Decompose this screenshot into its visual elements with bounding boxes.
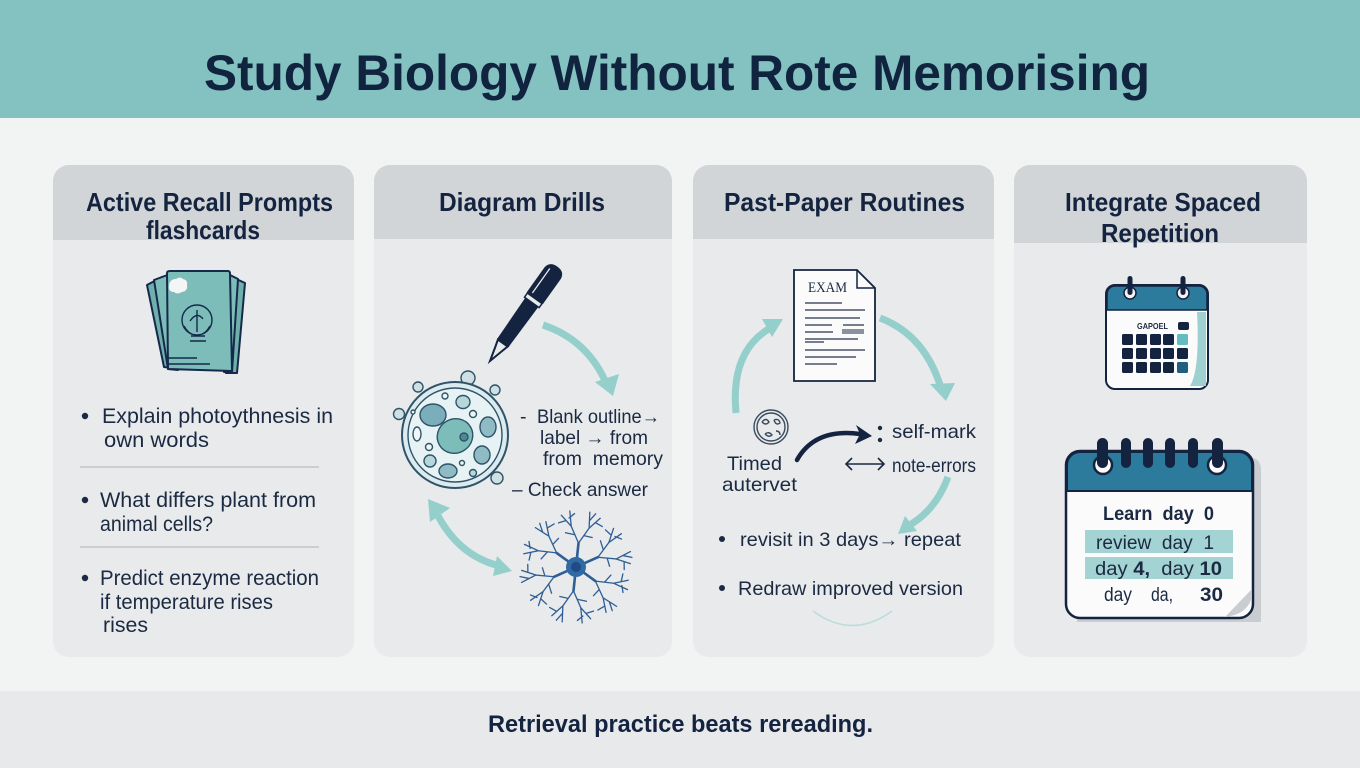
text: drill steps: label → from: [540, 427, 648, 449]
panel: active recall prompts: [53, 165, 354, 657]
bullet list: recall prompts: [80, 405, 333, 637]
text: timed attempt: Timed: [727, 453, 782, 475]
heading: integrate spaced repetition: [1065, 187, 1261, 248]
heading: integrate spaced repetition: Repetition: [1101, 218, 1219, 248]
arrow: pen to cell: [543, 325, 619, 396]
bullet list: recall prompts: What differs plant from: [100, 489, 316, 512]
bullet list: recall prompts: Explain photoythnesis in: [102, 405, 333, 428]
text: timed attempt: autervet: [722, 474, 798, 496]
text: drill steps: [512, 406, 663, 501]
icon: cell diagram: [394, 371, 508, 488]
heading: diagram drills: Diagram Drills: [439, 187, 605, 217]
text: spacing schedule: review day 1: [1096, 533, 1214, 554]
heading: active recall prompts: Active Recall Prompts: [86, 187, 333, 217]
text: drill steps: Blank outline→: [537, 406, 660, 428]
panel: integrate spaced repetition: [1014, 165, 1307, 657]
heading: active recall prompts: flashcards: [146, 215, 260, 245]
text: self-mark and note errors: note-errors: [892, 455, 976, 477]
bullet list: recall prompts: if temperature rises: [100, 591, 273, 614]
bullet list: recall prompts: own words: [104, 429, 209, 452]
heading: integrate spaced repetition: Integrate Spaced: [1065, 187, 1261, 217]
text: spacing schedule: day: [1104, 585, 1132, 606]
footer band: [0, 691, 1360, 768]
icon: small calendar: GAPOEL: [1137, 321, 1168, 331]
icon: flashcards: [147, 271, 245, 373]
text: self-mark and note errors: [846, 421, 976, 477]
text: self-mark and note errors: self-mark: [892, 421, 976, 443]
bullet list: recall prompts: rises: [103, 614, 148, 637]
bullet list: recall prompts: animal cells?: [100, 513, 213, 536]
panel: past-paper routines: [693, 165, 994, 657]
bullet list: routine steps: [719, 529, 963, 600]
text: spacing schedule: Learn day 0: [1103, 504, 1214, 525]
icon: timer: [754, 410, 788, 444]
heading: past-paper routines: Past-Paper Routines: [724, 187, 965, 217]
panel: diagram drills: [374, 165, 672, 657]
icon: exam paper: [794, 270, 875, 381]
title banner: [0, 0, 1360, 118]
arrow: note errors to revisit: [898, 477, 948, 534]
text: drill steps: -: [520, 406, 526, 428]
text: drill steps: – Check answer: [512, 479, 648, 501]
bullet list: routine steps: revisit in 3 days→ repeat: [740, 529, 962, 551]
arrow: double-headed cell to neuron: [428, 499, 512, 576]
arrow: timed attempt to exam: [735, 319, 783, 413]
arrow: timed to self-mark: [797, 425, 872, 460]
heading: active recall prompts: [86, 187, 333, 245]
icon: neuron: [511, 505, 641, 629]
text: spacing schedule: day 4, day 10: [1095, 559, 1222, 580]
icon: small calendar: [1106, 276, 1208, 389]
text: spacing schedule: [1095, 504, 1223, 606]
title: Study Biology Without Rote Memorising: [204, 45, 1150, 101]
footer takeaway: Retrieval practice beats rereading.: [488, 711, 873, 738]
bullet list: recall prompts: Predict enzyme reaction: [100, 567, 319, 590]
icon: exam paper: EXAM: [808, 280, 847, 296]
text: spacing schedule: 30: [1200, 585, 1223, 606]
icon: pen: [482, 261, 566, 367]
icon: large calendar schedule: [1066, 438, 1261, 622]
text: timed attempt: [722, 453, 798, 496]
text: drill steps: from memory: [543, 448, 663, 470]
arrow: exam to self-mark: [880, 318, 955, 401]
text: spacing schedule: da,: [1151, 585, 1173, 606]
bullet list: routine steps: Redraw improved version: [738, 578, 963, 600]
